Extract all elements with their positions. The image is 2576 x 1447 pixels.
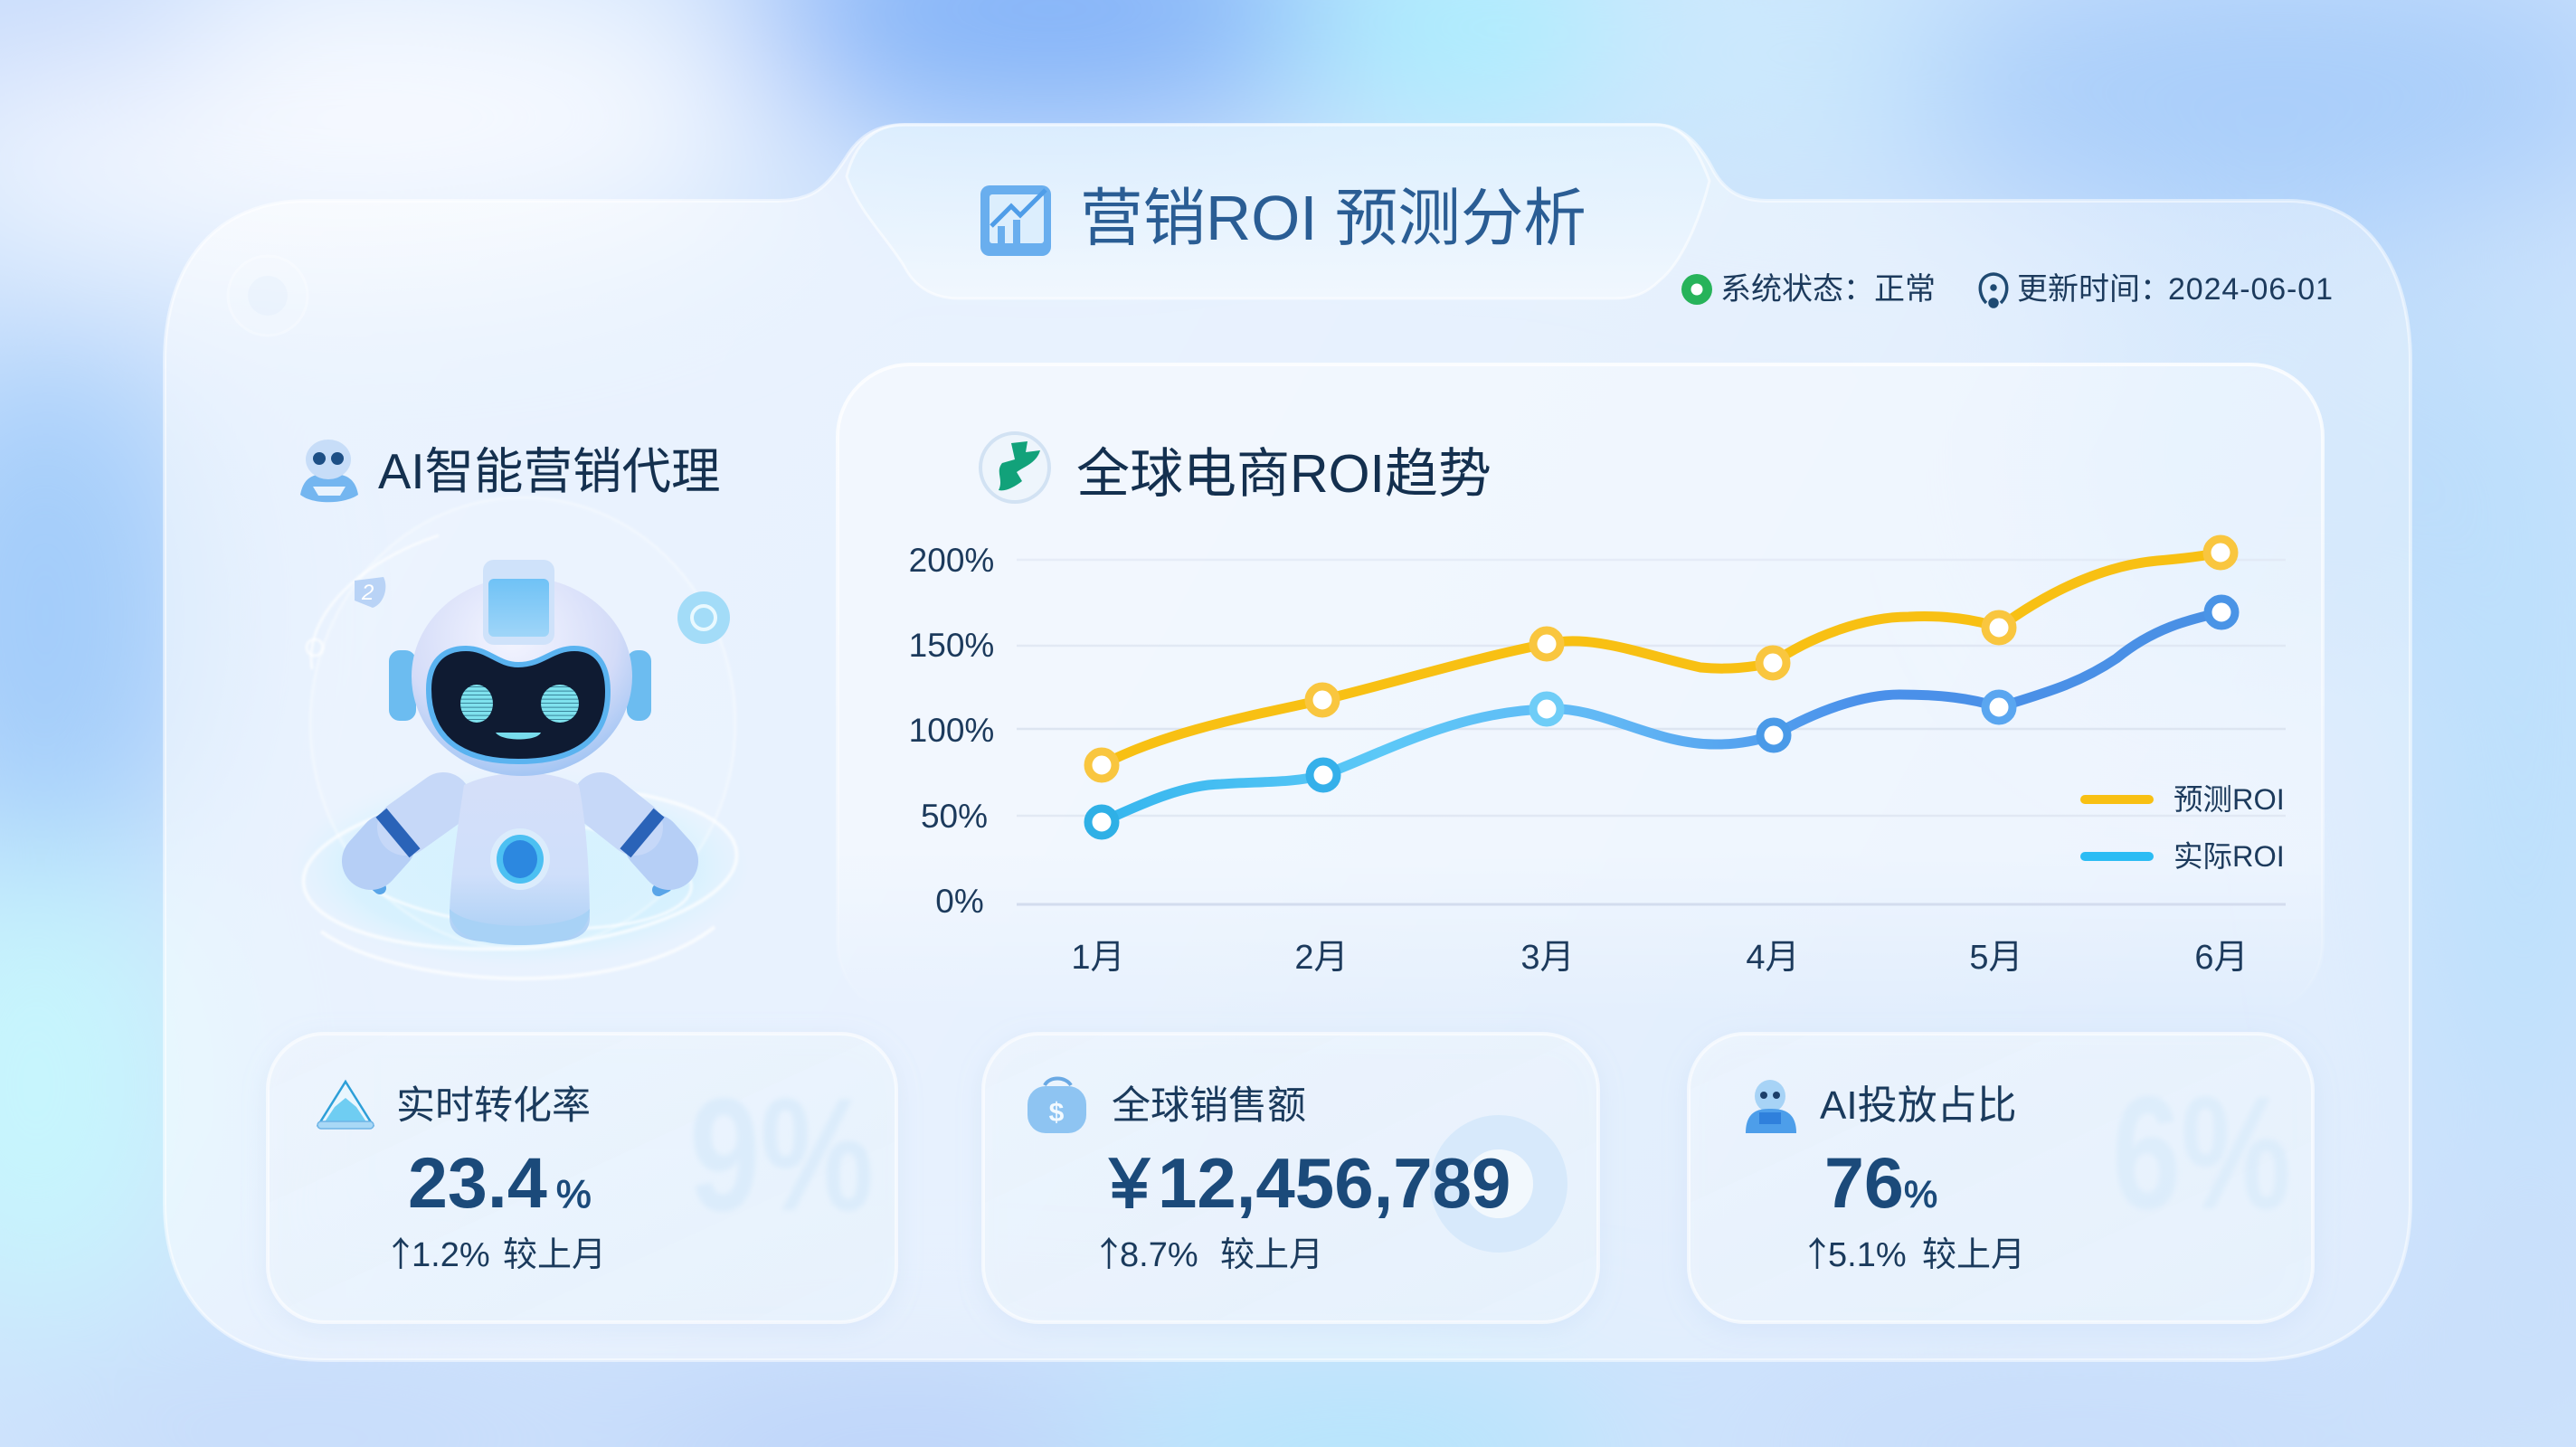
panel: main glass panel bbox=[165, 125, 2410, 1360]
eyes bbox=[460, 685, 579, 723]
icon: small robot bbox=[1746, 1080, 1796, 1133]
icon: globe leaf bbox=[980, 433, 1049, 502]
value: 23.4% bbox=[408, 1142, 592, 1223]
icon: status dot bbox=[1681, 274, 1712, 305]
delta bbox=[1800, 1226, 2025, 1276]
head bbox=[412, 577, 632, 776]
card: AI share bbox=[1689, 1034, 2313, 1322]
delta: 8.7% bbox=[1120, 1236, 1198, 1274]
panel: chart bbox=[838, 364, 2323, 1016]
delta: 较上月 bbox=[1220, 1236, 1323, 1274]
y axis labels: 100% bbox=[909, 712, 994, 749]
label: AI投放占比 bbox=[1820, 1083, 2017, 1128]
card: global sales bbox=[983, 1034, 1598, 1322]
delta: ↑ bbox=[1800, 1226, 1834, 1276]
y axis labels bbox=[909, 542, 994, 920]
orbit bubble bbox=[310, 497, 735, 950]
update time: 更新时间： bbox=[2017, 272, 2171, 307]
delta: 较上月 bbox=[503, 1236, 606, 1274]
icon: clock bbox=[1980, 274, 2007, 307]
delta bbox=[1092, 1226, 1323, 1276]
x axis labels: 1月 bbox=[1071, 939, 1125, 977]
y axis labels: 150% bbox=[909, 627, 994, 664]
x axis labels: 5月 bbox=[1969, 939, 2023, 977]
top module bbox=[483, 560, 554, 645]
icon: faint glass disc bbox=[228, 256, 308, 336]
watermark ring bbox=[1447, 1132, 1550, 1235]
line: forecast ROI bbox=[1088, 539, 2234, 779]
value: ¥ bbox=[1109, 1143, 1150, 1223]
gridlines bbox=[1017, 560, 2286, 904]
icon: mountain bbox=[317, 1082, 374, 1129]
chart heading: 全球电商ROI趋势 bbox=[1076, 444, 1492, 504]
icon: chart square bbox=[980, 185, 1051, 256]
floating badge left: 2 bbox=[361, 581, 374, 605]
floating badge left bbox=[355, 577, 385, 608]
heading text: AI智能营销代理 bbox=[378, 444, 720, 499]
x axis labels bbox=[1071, 939, 2249, 977]
y axis labels: 0% bbox=[935, 883, 984, 920]
right arm bbox=[601, 800, 669, 890]
x axis labels: 3月 bbox=[1520, 939, 1575, 977]
title tab bbox=[847, 125, 1709, 298]
icon: small robot bbox=[300, 440, 358, 502]
ears bbox=[389, 650, 651, 721]
legend: 实际ROI bbox=[2174, 840, 2285, 873]
watermark: 9% bbox=[689, 1064, 874, 1244]
delta: 较上月 bbox=[1922, 1236, 2025, 1274]
value: 76% bbox=[1824, 1142, 1937, 1223]
delta bbox=[384, 1226, 606, 1276]
left arm bbox=[371, 800, 443, 888]
chest core bbox=[490, 828, 550, 890]
legend bbox=[2080, 783, 2285, 873]
x axis labels: 4月 bbox=[1746, 939, 1800, 977]
x axis labels: 2月 bbox=[1294, 939, 1349, 977]
system status bbox=[1681, 272, 2333, 307]
icon: money bag: $ bbox=[1049, 1098, 1065, 1128]
y axis labels: 50% bbox=[921, 798, 988, 835]
floating bubble right bbox=[677, 591, 730, 644]
status text: 系统状态：正常 bbox=[1720, 272, 1936, 307]
orbit rings bbox=[298, 535, 743, 979]
base bbox=[450, 909, 590, 945]
visor bbox=[429, 648, 608, 761]
line: actual ROI bbox=[1088, 599, 2235, 836]
label: 实时转化率 bbox=[396, 1084, 591, 1128]
body bbox=[450, 772, 590, 942]
legend: 预测ROI bbox=[2174, 783, 2285, 816]
icon: money bag bbox=[1028, 1078, 1086, 1133]
delta: 5.1% bbox=[1828, 1236, 1907, 1274]
delta: 1.2% bbox=[412, 1236, 490, 1274]
watermark: 6% bbox=[2112, 1063, 2291, 1243]
delta: ↑ bbox=[1092, 1226, 1126, 1276]
illustration: robot bbox=[289, 497, 751, 979]
update time: 2024-06-01 bbox=[2168, 272, 2333, 307]
orbit glow bbox=[289, 769, 751, 968]
title text: 营销ROI 预测分析 bbox=[1080, 183, 1586, 253]
label: 全球销售额 bbox=[1112, 1084, 1306, 1128]
card: conversion rate bbox=[268, 1034, 896, 1322]
value: 12,456,789 bbox=[1158, 1143, 1511, 1223]
panel: agent heading bbox=[300, 440, 720, 502]
y axis labels: 200% bbox=[909, 542, 994, 579]
delta: ↑ bbox=[384, 1226, 418, 1276]
x axis labels: 6月 bbox=[2194, 939, 2249, 977]
mouth bbox=[496, 733, 541, 740]
